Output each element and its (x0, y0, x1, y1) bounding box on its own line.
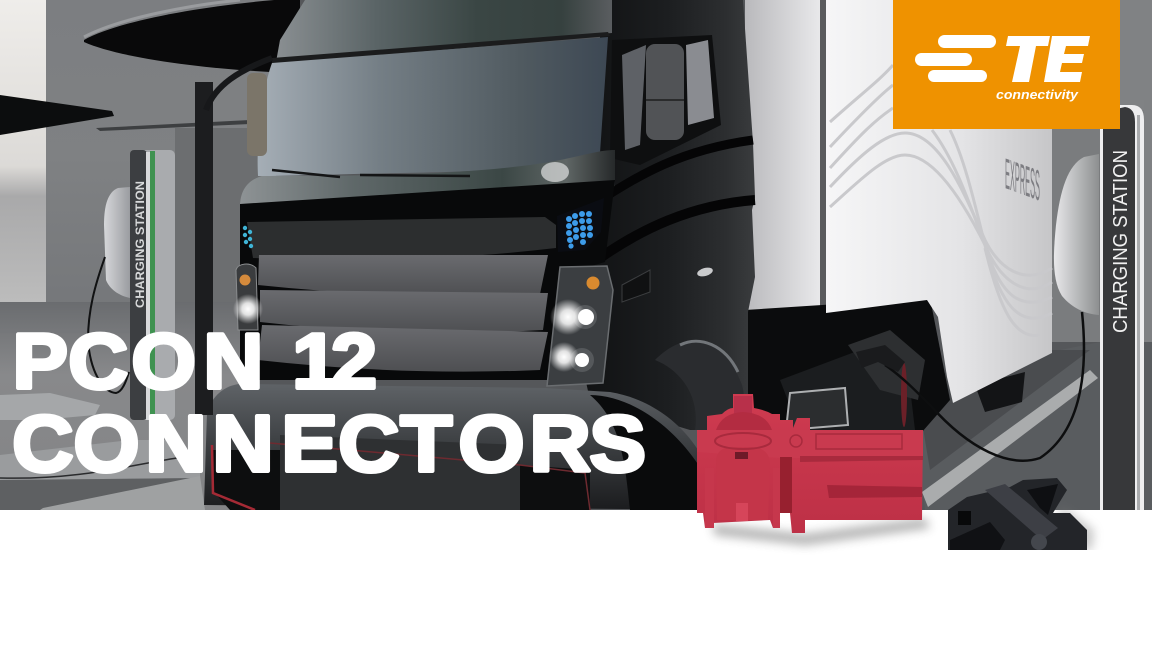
windshield (258, 37, 608, 176)
fender highlight (655, 343, 744, 396)
side mirror (646, 44, 684, 140)
main canopy (84, 0, 300, 72)
embossed markings (715, 433, 771, 449)
connector body (697, 394, 923, 533)
title line 2: CONNECTORS (12, 399, 646, 488)
truck bumper (204, 341, 744, 510)
blue LED cluster right (566, 211, 593, 249)
left headlight (233, 264, 263, 330)
lower face groove (827, 485, 922, 498)
canopy pole and arm (195, 82, 213, 415)
trailer (745, 0, 1052, 440)
charger bulb (1054, 154, 1099, 315)
icon: TE stripes (915, 35, 996, 82)
body crease lines (600, 140, 753, 200)
left charging station (88, 58, 272, 420)
truck front grille (240, 180, 615, 380)
trailer side panel (826, 0, 1052, 403)
bottom white band (0, 510, 1152, 648)
blue LED cluster left (243, 226, 253, 248)
right station label: CHARGING STATION (1110, 150, 1132, 333)
title: PCON 12 CONNECTORS (12, 318, 646, 488)
side marker badge (622, 270, 650, 302)
central latch (716, 447, 770, 520)
right headlight (547, 266, 613, 386)
title line 1: PCON12 (13, 318, 377, 405)
right charging station (856, 105, 1144, 510)
logo wordmark TE (1006, 36, 1090, 82)
charging plug (856, 345, 905, 372)
side window (610, 35, 721, 165)
hero photograph: electric truck at charging station (0, 0, 1152, 510)
grille top panel (247, 217, 556, 260)
door handle light (697, 268, 713, 276)
underside and wheel well (745, 298, 950, 440)
background scene: sky, building and ground (0, 0, 1152, 510)
left station label: CHARGING STATION (133, 181, 147, 308)
trailer front section (745, 0, 826, 315)
top face (697, 430, 923, 458)
charger cable (885, 312, 1084, 461)
truck cab upper body (240, 0, 755, 430)
roof (276, 0, 612, 62)
hood band (240, 150, 615, 204)
trailer wave graphic (830, 65, 1052, 336)
charger bulb (104, 187, 130, 298)
wing mirror left (247, 73, 267, 156)
dark slot (780, 457, 792, 513)
left canopy (0, 95, 114, 135)
logo: TE connectivity (893, 0, 1120, 129)
logo wordmark connectivity: connectivity (996, 88, 1079, 102)
cab side and door (586, 0, 755, 430)
trailer lettering: EXPRESS: EXPRESS (1005, 149, 1040, 210)
product: black PCON 12 connector (948, 478, 1094, 550)
charger cable (88, 257, 129, 393)
product: red PCON 12 connector (697, 394, 930, 545)
station body (144, 150, 175, 420)
grille slats (258, 255, 548, 372)
